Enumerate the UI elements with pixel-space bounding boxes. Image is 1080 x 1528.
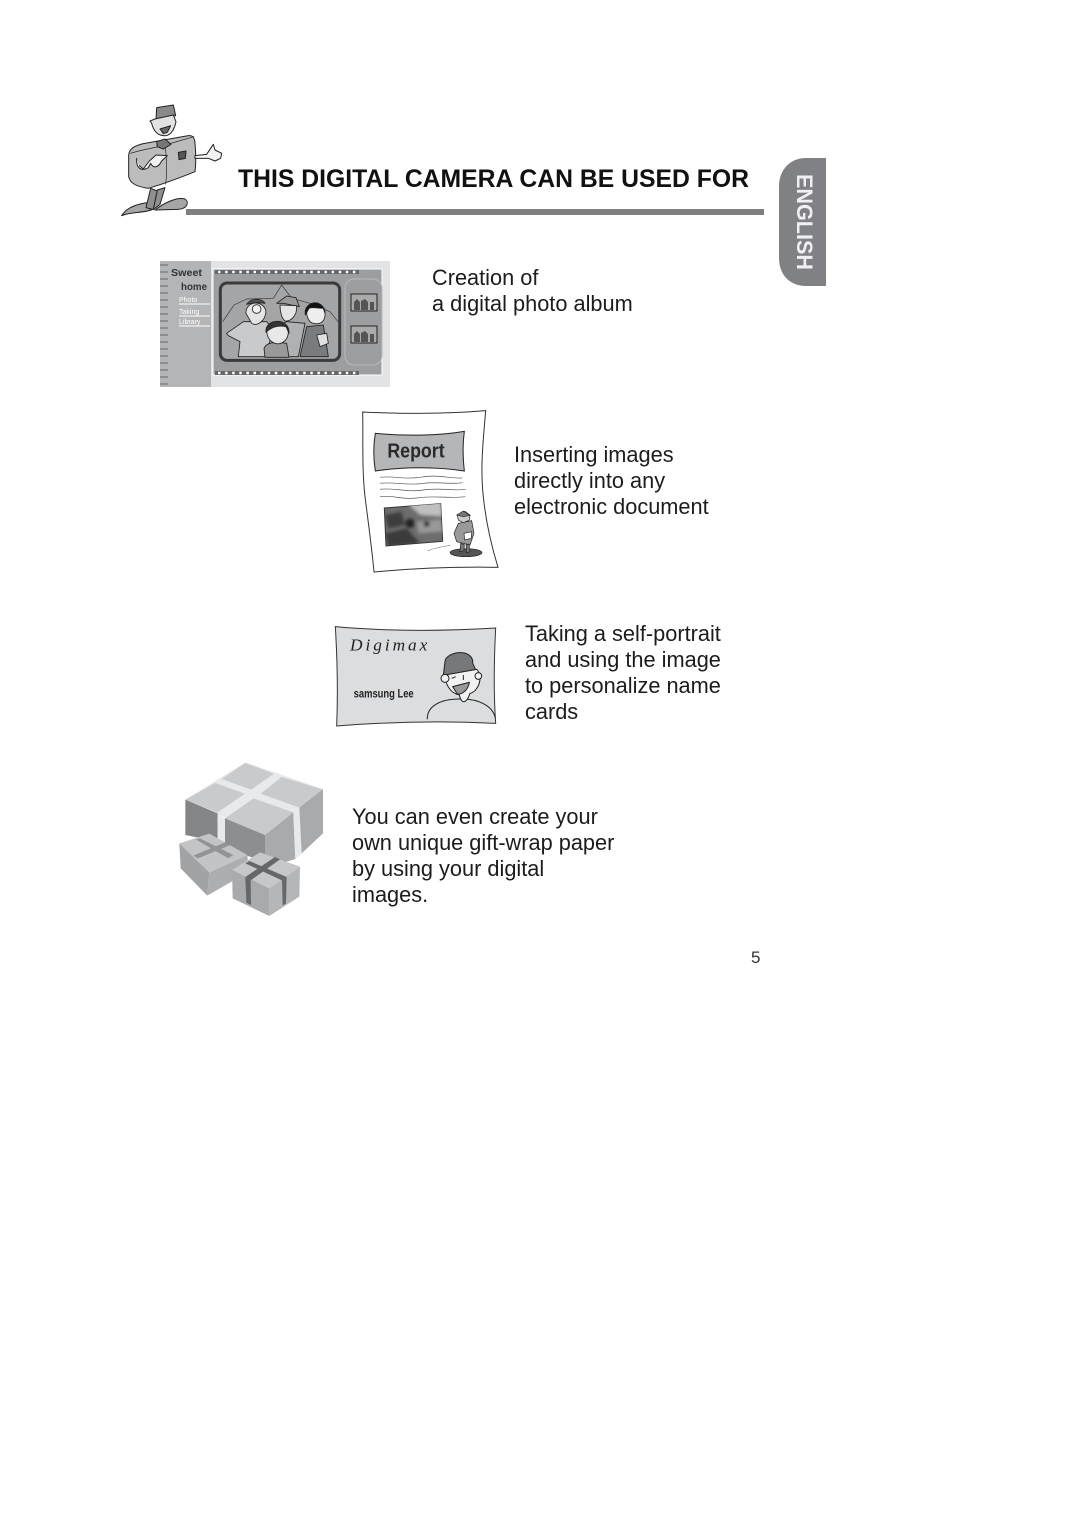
album sidebar labels <box>171 267 210 326</box>
text: gift wrap: own unique gift-wrap paper <box>352 830 614 855</box>
card name: samsung Lee <box>354 686 414 700</box>
film strips <box>215 270 359 375</box>
page canvas <box>121 104 826 963</box>
text: gift wrap <box>352 804 614 907</box>
illustration: name card <box>335 627 496 726</box>
text: electronic document <box>514 442 709 519</box>
text: photo album: Creation of <box>432 265 539 290</box>
small right box <box>232 852 300 916</box>
album sidebar labels: home <box>181 281 207 293</box>
album sidebar labels: Library <box>179 319 201 326</box>
album sidebar labels: Sweet <box>171 267 203 279</box>
text: electronic document: directly into any <box>514 468 665 493</box>
report heading: Report <box>387 440 445 462</box>
album sidebar labels: Photo <box>179 297 197 304</box>
illustration: photo album screen <box>160 261 390 387</box>
text: gift wrap: You can even create your <box>352 804 598 829</box>
heading rule <box>186 209 764 215</box>
page number: 5 <box>751 948 760 967</box>
album binding spiral <box>160 265 168 384</box>
small camera figure <box>450 511 482 557</box>
text: name cards: and using the image <box>525 647 721 672</box>
text: photo album: a digital photo album <box>432 291 633 316</box>
illustration: report document <box>363 411 498 572</box>
album sidebar labels: Taking <box>179 309 199 316</box>
text: gift wrap: images. <box>352 882 428 907</box>
title: THIS DIGITAL CAMERA CAN BE USED FOR <box>238 165 749 193</box>
large box <box>185 762 323 868</box>
portrait <box>427 653 495 719</box>
text: gift wrap: by using your digital <box>352 856 544 881</box>
illustration: gift boxes <box>179 762 323 916</box>
text: electronic document: electronic document <box>514 494 709 519</box>
report photo <box>384 502 443 547</box>
thumbnail panel <box>345 279 382 365</box>
text: name cards: to personalize name <box>525 673 721 698</box>
text: photo album <box>432 265 633 316</box>
language tab: English: ENGLISH <box>792 174 817 270</box>
icon: camera mascot <box>122 105 222 216</box>
text: name cards: cards <box>525 699 578 724</box>
main photo frame <box>220 283 340 360</box>
text: electronic document: Inserting images <box>514 442 674 467</box>
card brand: Digimax <box>349 636 428 655</box>
report text lines <box>380 476 466 498</box>
small left box <box>179 834 249 896</box>
text: name cards: Taking a self-portrait <box>525 621 721 646</box>
text: name cards <box>525 621 721 724</box>
language tab: English <box>779 158 826 286</box>
